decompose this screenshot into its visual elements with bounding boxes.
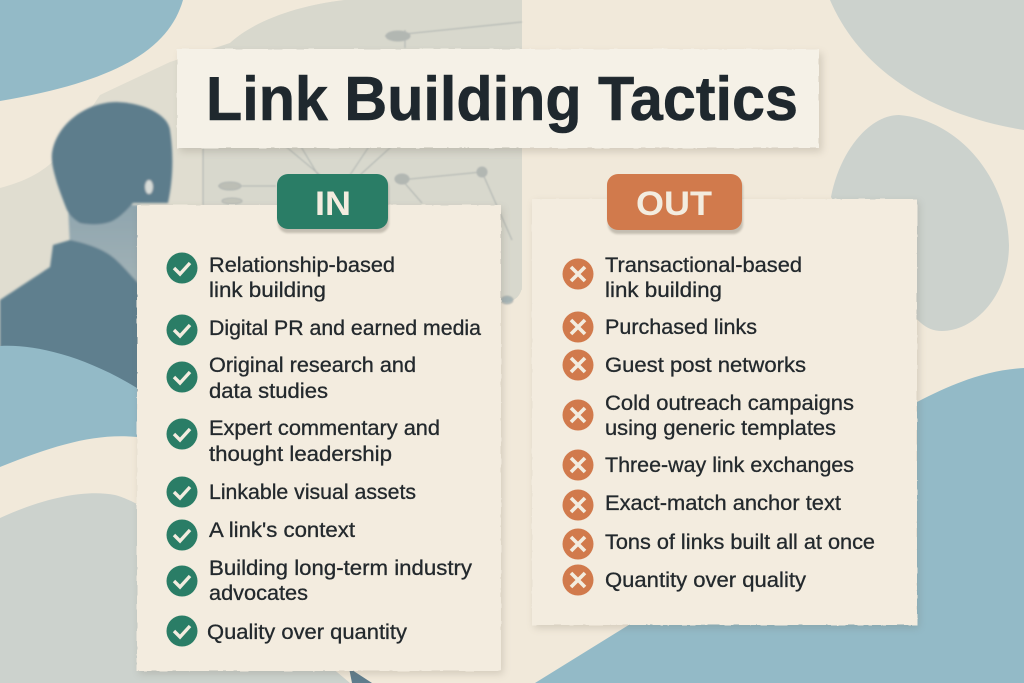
background: person silhouette [0,102,172,400]
item: Transactional-based link building [562,254,802,302]
item: A link's context: A link's context [209,519,355,542]
item: Relationship-based link building: link building [209,279,326,302]
item: Expert commentary and thought leadership: thought leadership [209,443,392,466]
item: Tons of links built all at once: Tons of links built all at once [605,531,875,554]
item: Relationship-based link building [166,252,395,302]
background: network sketch panel [177,0,522,302]
item: Exact-match anchor text [562,490,841,520]
IN badge [277,174,389,233]
background: blue blob top left [0,0,183,101]
OUT badge [607,174,743,234]
item: Linkable visual assets: Linkable visual assets [209,481,416,504]
title card [177,49,822,152]
item: Guest post networks [562,350,806,380]
item: Linkable visual assets [166,476,416,508]
item: Expert commentary and thought leadership: Expert commentary and [209,417,440,440]
background: grey blob right [831,115,1009,331]
item: A link's context [166,519,355,550]
item: Quality over quantity [166,616,408,646]
silhouette: neck [68,205,140,290]
background: dark corner below in panel [349,668,372,683]
item: Exact-match anchor text: Exact-match anchor text [605,492,841,515]
title paper [177,49,822,152]
panel: OUT [532,174,919,628]
item: Three-way link exchanges [562,450,854,480]
item: Expert commentary and thought leadership [166,417,440,466]
item: Purchased links: Purchased links [605,316,757,339]
item: Original research and data studies: Original research and [209,354,416,377]
item: Digital PR and earned media: Digital PR and earned media [209,317,481,340]
item: Building long-term industry advocates: Building long-term industry [209,557,473,580]
silhouette: head [52,102,172,224]
background: grey blob lower left [0,493,350,683]
item: Original research and data studies [166,354,416,403]
panel: IN [137,174,503,674]
background: light grey wash behind figure [0,0,522,400]
item: Digital PR and earned media [166,314,481,346]
background: network diagram sketch [203,22,522,304]
item: Building long-term industry advocates [166,557,473,605]
OUT badge: OUT [636,185,712,223]
item: Quantity over quality: Quantity over quality [605,569,807,592]
item: Relationship-based link building: Relationship-based [209,254,395,277]
item: Transactional-based link building: Transactional-based [605,254,802,277]
IN paper [137,205,503,674]
background: grey blob top right [830,0,1024,130]
title: Link Building Tactics [206,65,798,134]
item: Three-way link exchanges: Three-way link exchanges [605,454,854,477]
IN badge: IN [315,185,351,223]
item: Guest post networks: Guest post networks [605,354,806,377]
item: Quantity over quality [562,564,807,596]
item: Original research and data studies: data studies [209,380,328,403]
item: Tons of links built all at once [562,528,875,560]
item: Purchased links [562,312,757,342]
OUT paper [532,199,919,628]
silhouette: shoulders and shirt [0,240,140,400]
background: blue shape bottom right [535,368,1024,683]
item: Building long-term industry advocates: advocates [209,582,308,605]
item: Cold outreach campaigns using generic templates: using generic templates [605,417,836,440]
silhouette: ear highlight [145,180,153,194]
item: Cold outreach campaigns using generic templates: Cold outreach campaigns [605,392,854,415]
item: Quality over quantity: Quality over quantity [207,621,408,644]
background: blue blob left [0,346,137,467]
item: Transactional-based link building: link building [605,279,722,302]
item: Cold outreach campaigns using generic templates [562,392,854,440]
